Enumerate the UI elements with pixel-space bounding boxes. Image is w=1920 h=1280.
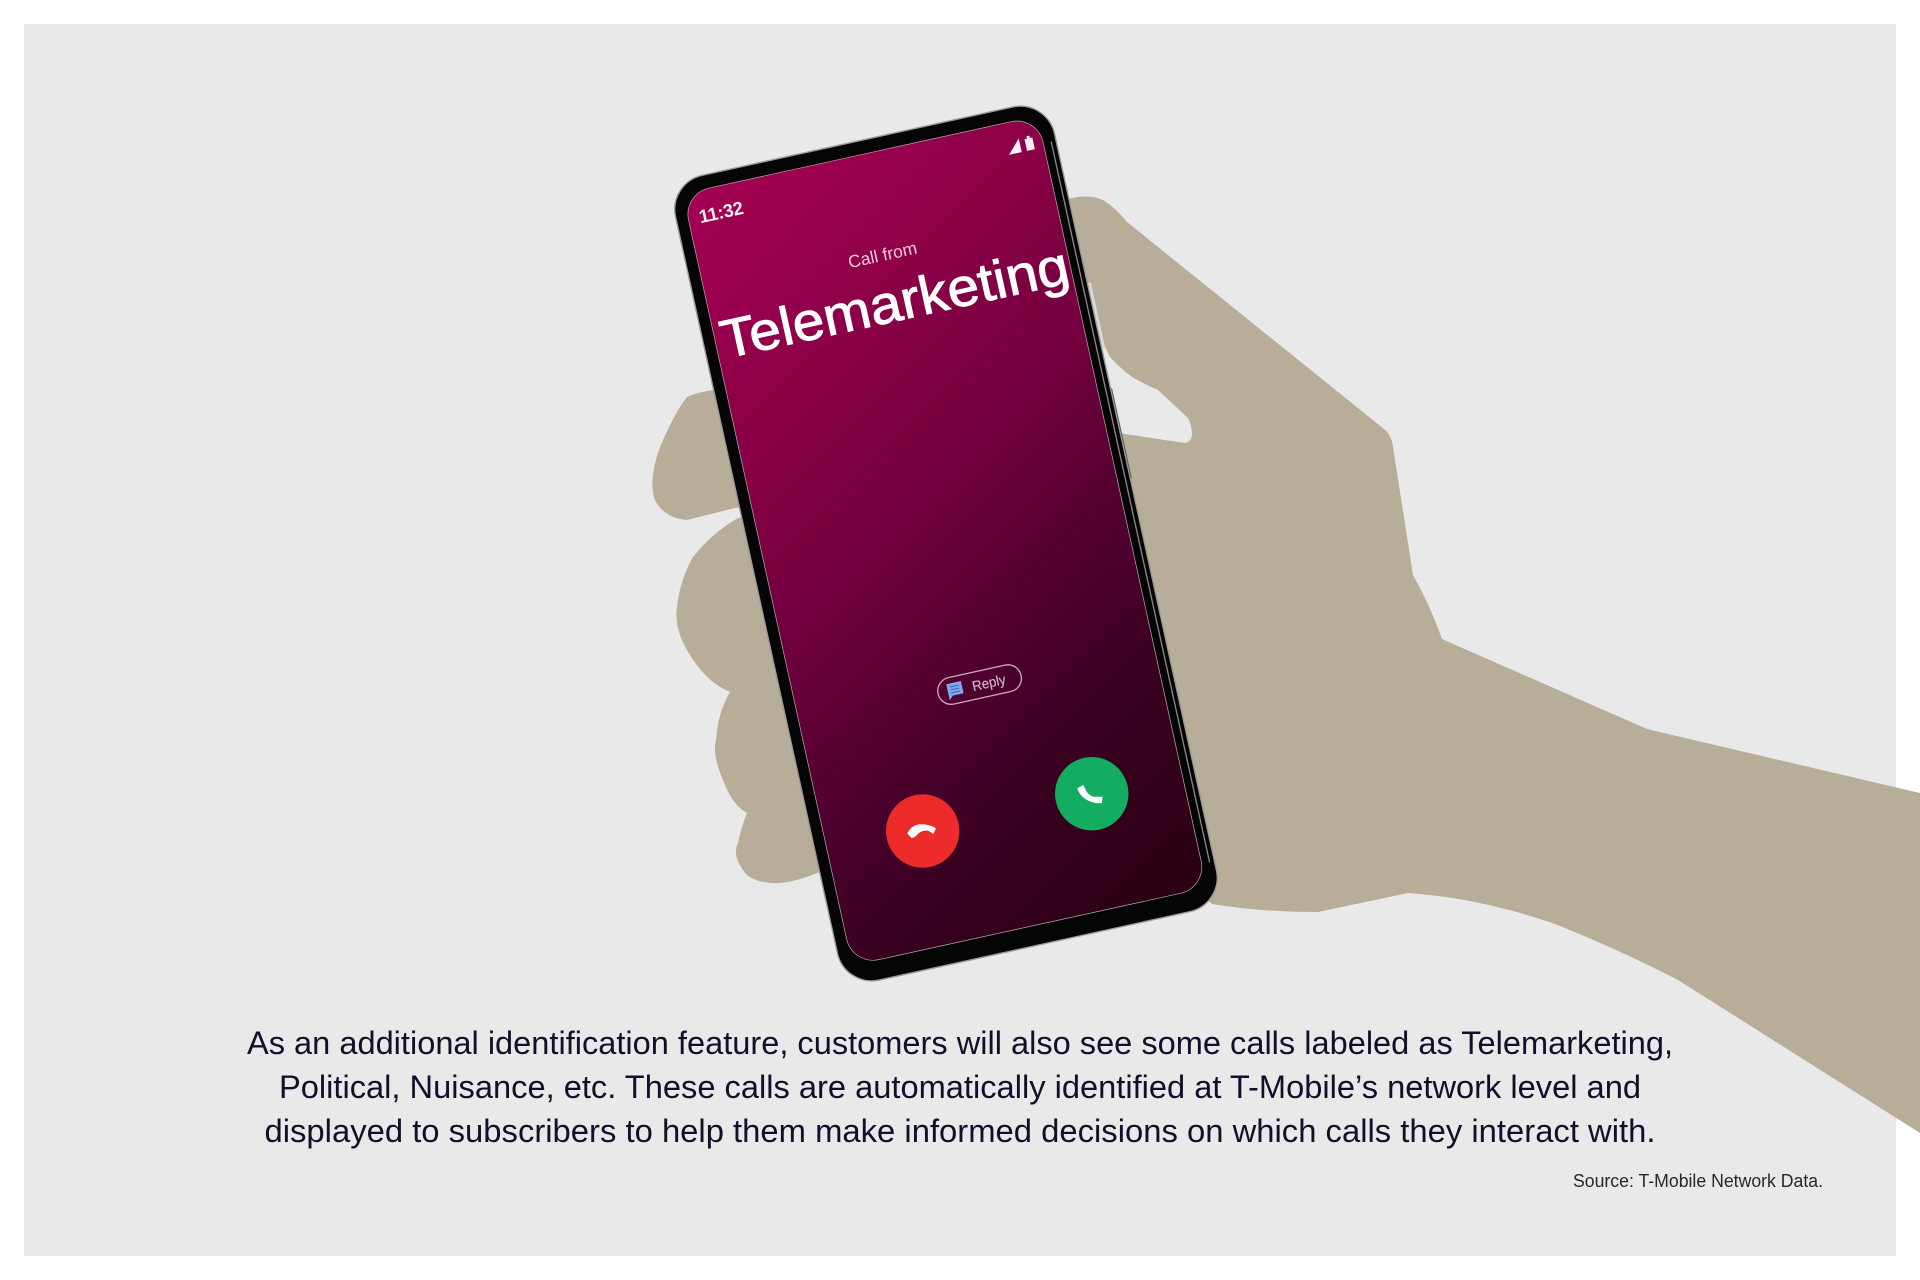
- icon: answer handset: [1077, 785, 1103, 803]
- body text: Political, Nuisance, etc. These calls are automatically identified at T-Mobile’s network level and: [279, 1069, 1641, 1105]
- phone body: [668, 99, 1224, 988]
- caller name: Telemarketing: [715, 236, 1074, 370]
- body text: displayed to subscribers to help them make informed decisions on which calls they interact with.: [264, 1113, 1656, 1149]
- reply pill: [935, 662, 1024, 707]
- source note: Source: T-Mobile Network Data.: [1573, 1171, 1823, 1191]
- phone side buttons: [1086, 282, 1134, 479]
- status icons: [1006, 135, 1035, 155]
- icon: message bubble: [946, 681, 964, 700]
- icon: hang up handset: [907, 824, 936, 838]
- phone: [668, 99, 1227, 988]
- body text: [247, 1025, 1673, 1149]
- status bar time: 11:32: [697, 197, 745, 227]
- body text: As an additional identification feature, customers will also see some calls labeled as Telemarketing,: [247, 1025, 1673, 1061]
- caller label: Call from: [846, 238, 919, 272]
- phone edge highlight: [1051, 142, 1210, 862]
- decline button: [879, 787, 966, 875]
- answer button: [1048, 750, 1135, 837]
- hand silhouette: [652, 196, 1920, 1133]
- reply label: Reply: [971, 671, 1007, 694]
- phone screen: [683, 116, 1207, 965]
